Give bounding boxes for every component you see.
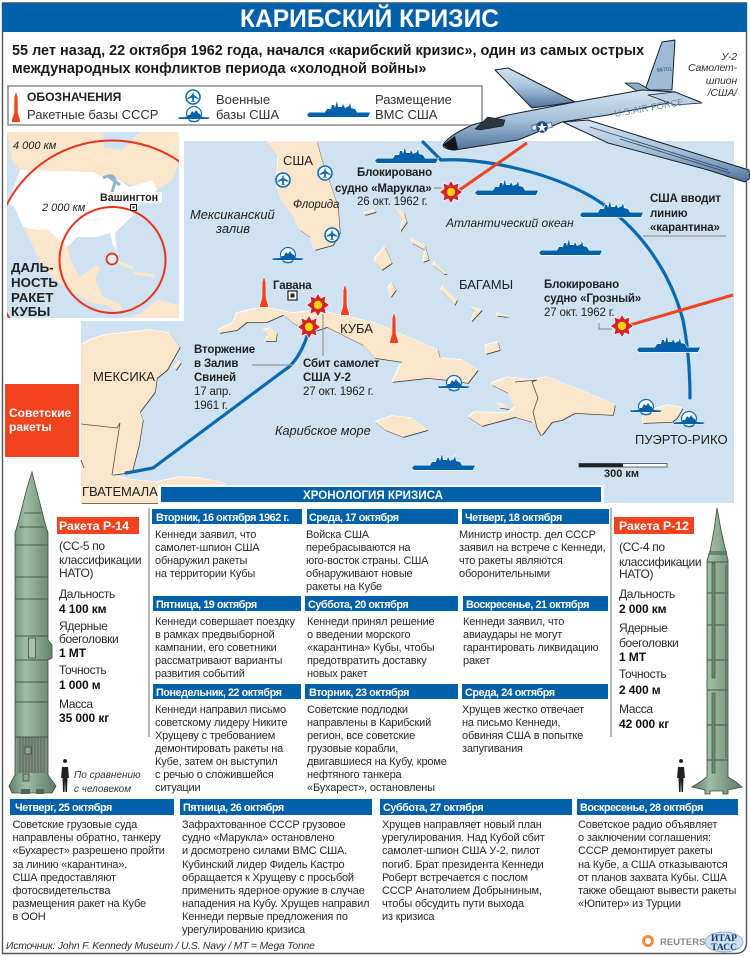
scale bar [579,464,667,480]
R-12 figures: 2 000 км [619,602,667,616]
timeline rules [149,508,611,737]
R-14 specs [57,517,141,725]
entry: 19 October [153,596,301,680]
entry: 17 October: перебрасываются на [306,542,411,554]
entry: 21 October: Кеннеди заявил, что [463,616,564,628]
legend label: US navy: Размещение [375,92,452,107]
entry: 21 October: ракет [463,655,490,667]
map labels: Карибское море [275,424,371,438]
4000 km range circle [0,140,230,378]
map labels: Свиней [194,372,236,384]
entry: 19 October: рассматривают варианты [155,655,282,667]
section tag: soviet missiles: ракеты [9,420,52,434]
title banner: КАРИБСКИЙ КРИЗИС [240,3,499,33]
entry: 27 October: Суббота, 27 октября [383,802,483,814]
plane fin number: 66701 [657,66,672,74]
entry: 26 October [180,799,372,936]
map labels [82,153,728,499]
inset title: НОСТЬ [11,275,58,290]
entry: 16 October: на территории Кубы [155,568,255,580]
inset sea [7,132,179,318]
R-14 figures: Масса [59,697,93,711]
plane nose [443,136,458,150]
entry: 17 October: Среда, 17 октября [309,512,399,524]
entry: 25 October: направлены обратно, танкеру [12,832,161,844]
R-14 figures: боеголовки [59,632,118,646]
map labels: Сбит самолет [303,358,380,370]
logo: ITAR-TASS [705,932,743,953]
Cuba marker [106,254,118,264]
entry: 21 October: авиаудары не могут [463,629,562,641]
plane near wing [563,120,750,182]
plane caption: У-2 [720,51,737,63]
map labels: Блокировано [357,167,432,179]
map labels: США [283,153,313,168]
inset Mexico and Central America [23,227,123,312]
entry: 19 October: кампании, его советники [155,642,277,654]
R-12 figures: 1 МТ [619,650,647,664]
timeline heading: ХРОНОЛОГИЯ КРИЗИСА [303,488,443,502]
icon: man for scale right [677,759,685,792]
plane fuselage lettering: U.S.AIR FORCE [614,97,685,120]
entry: 28 October: СССР демонтирует ракеты [578,845,713,857]
land masses [80,141,684,504]
icon: air base legend [186,90,200,104]
entry: 27 October [380,799,572,923]
entry: 20 October: о введении морского [307,629,410,641]
source line: Источник: John F. Kennedy Museum / U.S. Navy / MT = Mega Tonne [6,941,315,952]
main map [80,141,734,504]
navy ships [375,147,700,470]
entry: 22 October: советскому лидеру Никите [155,717,287,729]
R-14 figures: Дальность [59,587,115,601]
plane wing detail [590,127,730,173]
plane near stabilizer [648,92,702,105]
invasion route [126,336,307,473]
inset USA [8,170,157,255]
map labels: МЕКСИКА [93,369,155,384]
R-14 figures: 35 000 кг [59,711,109,725]
legend label: US bases: базы США [216,107,279,122]
map labels: «карантина» [650,222,720,234]
air bases [276,166,339,242]
Havana marker [288,291,297,300]
entry: 22 October [153,684,301,794]
map labels: 26 окт. 1962 г. [357,196,427,208]
R-14 figures: 1 МТ [59,646,87,660]
plane caption: /США/ [707,87,738,99]
plane caption: шпион [706,75,737,87]
map labels: линию [650,208,688,220]
entry: 22 October: Понедельник, 22 октября [156,687,282,699]
entry: 22 October: с речью о сложившейся [155,769,274,781]
entry: 27 October: чтобы обсудить пути выхода [382,898,525,910]
R-12 description: (СС-4 по [619,540,665,554]
comparison note: По сравнению [74,770,141,781]
entry: 16 October: Вторник, 16 октября 1962 г. [156,512,289,524]
2000 km range circle [60,207,166,313]
US quarantine line [423,142,690,398]
entry: 24 October: запугивания [462,743,523,755]
entry: 23 October: «Бухарест», остановлены [307,782,435,794]
entry: 25 October: «Бухарест» разрешено пройти [12,845,165,857]
plane far stabilizer [625,83,650,93]
entry: 16 October: обнаружил ракеты [155,555,247,567]
entry: 17 October: ракеты на Кубе [306,581,382,593]
entry: 22 October: демонтировать ракеты на [155,743,284,755]
entry: 23 October: Советские подлодки [307,704,408,716]
entry: 23 October: Вторник, 23 октября [309,687,409,699]
legend label: US navy: ВМС США [375,107,438,122]
logo: ITAR-TASS: ИТАР [711,934,737,944]
map labels: США вводит [650,193,721,205]
entry: 25 October [10,799,174,923]
entry: 25 October: в ООН [12,911,46,923]
entry: 18 October: Министр иностр. дел СССР [459,529,596,541]
entry: 23 October [305,684,458,794]
comparison note: с человеком [74,784,131,795]
sea [81,141,734,503]
icon: naval base legend [178,106,210,122]
red flight line to Grozny [630,295,733,325]
entry: 26 October: Кеннеди первые предложения по [182,911,348,923]
map labels: 1961 г. [194,400,228,412]
map labels: Вторжение [194,344,255,356]
entry: 20 October: Суббота, 20 октября [308,599,408,611]
entry: 25 October: США предоставляют [12,872,116,884]
entry: 26 October: Пятница, 26 октября [183,802,284,814]
R-12 description: классификации [619,555,701,569]
entry: 26 October: Кубинский лидер Фидель Кастро [182,859,345,871]
illustration: R-12 missile [692,508,742,794]
intro text: международных конфликтов периода «холодной войны» [12,61,426,77]
legend [8,86,482,125]
entry: 23 October: двигавшиеся на Кубу, кроме [307,756,447,768]
R-14 description: (СС-5 по [59,539,105,553]
entry: 23 October: нефтяного танкера [307,769,403,781]
R-14 figures: Ядерные [59,619,108,633]
map labels: судно «Грозный» [544,293,641,305]
timeline [10,509,738,936]
entry: 27 October: погиб. Брат президента Кеннеди [382,859,544,871]
map labels: 27 окт. 1962 г. [544,307,614,319]
entry: 28 October: «Юпитер» из Турции [578,898,681,910]
map labels: Гавана [273,280,312,292]
entry: 22 October: Кеннеди направил письмо [155,704,286,716]
plane far wing [495,68,575,108]
inset Great Lakes [103,176,120,192]
entry: 26 October: обращается к Хрущеву с просьбой [182,872,354,884]
map labels: Блокировано [544,279,619,291]
entry: 18 October: заявил на встрече с Кеннеди, [459,542,606,554]
entry: 24 October: на письмо Кеннеди, [462,717,560,729]
entry: 17 October: обнаруживают новые [306,568,413,580]
entry: 27 October: Хрущев направляет новый план [382,819,542,831]
entry: 22 October: ситуации [155,782,200,794]
legend label: US bases: Военные [216,92,270,107]
R-14 label: Ракета Р-14 [59,519,129,533]
entry: 28 October: также обещают вывести ракеты [578,885,736,897]
entry: 16 October: самолет-шпион США [155,542,260,554]
inset labels [13,140,162,214]
logo: ITAR-TASS: ТАСС [711,943,737,953]
R-12 label: Ракета Р-12 [619,519,689,533]
entry: 27 October: Роберт встречается с послом [382,872,528,884]
explosions [298,181,633,338]
map labels: Атлантический океан [445,216,574,230]
map labels: 17 апр. [194,386,231,398]
entry: 17 October [306,509,458,593]
R-14 description: НАТО) [59,566,93,580]
entry: 26 October: судно «Марукла» остановлено [182,832,334,844]
R-12 figures: Масса [619,702,653,716]
entry: 24 October: обвиняя США в попытке [462,730,583,742]
title banner [2,3,747,33]
entry: 19 October: развития событий [155,668,245,680]
plane roundel [532,121,552,133]
entry: 18 October: Четверг, 18 октября [465,512,562,524]
legend label: rocket bases: Ракетные базы СССР [27,107,158,122]
entry: 22 October: Кубе, затем он выступил [155,756,278,768]
scale bar: 300 км [604,468,639,480]
map labels: Мексиканский [190,207,275,222]
map labels: БАГАМЫ [459,277,513,292]
entry: 21 October [463,596,608,667]
legend title: ОБОЗНАЧЕНИЯ [27,90,121,104]
plane fuselage [443,90,700,150]
map labels: судно «Марукла» [335,183,432,195]
plane caption: Самолет- [688,62,738,74]
entry: 26 October: применить ядерное оружие в случае [182,885,365,897]
entry: 20 October: новых ракет [307,668,368,680]
map labels: КУБА [340,321,373,336]
inset title: ДАЛЬ- [11,260,54,275]
leader lines [252,188,726,365]
entry: 24 October: Среда, 24 октября [465,687,555,699]
entry: 27 October: самолет-шпион США У-2, пилот [382,845,540,857]
entry: 23 October: грузовые корабли, [307,743,398,755]
map labels: 27 окт. 1962 г. [303,386,373,398]
entry: 26 October: Зафрахтованное СССР грузовое [182,819,345,831]
timeline heading [158,485,604,504]
illustration: U-2 spy plane [443,40,750,182]
R-12 figures: Ядерные [619,621,668,635]
inset map: missile range [0,129,230,378]
R-14 figures: 1 000 м [59,678,101,692]
R-12 figures: Дальность [619,587,675,601]
entry: 20 October [305,596,458,680]
entry: 28 October: на Кубе, а США отказываются [578,859,728,871]
R-14 figures: 4 100 км [59,602,107,616]
inset South America [125,300,179,318]
entry: 26 October: нападения на Кубу. Хрущев направил [182,898,369,910]
entry: 18 October [459,509,609,580]
plane tail fin [645,40,675,90]
R-12 description: НАТО) [619,567,653,581]
entry: 21 October: Воскресенье, 21 октября [466,599,589,611]
entry: 25 October: за линию «карантина». [12,859,127,871]
entry: 26 October: урегулированию кризиса [182,924,306,936]
map labels: Флорида [293,199,339,211]
intro text: 55 лет назад, 22 октября 1962 года, начался «карибский кризис», один из самых острых [12,43,644,59]
entry: 21 October: гарантировать ликвидацию [463,642,598,654]
entry: 23 October: регион, все советские [307,730,415,742]
entry: 22 October: Хрущеву с требованием [155,730,275,742]
entry: 18 October: что ракеты являются [459,555,563,567]
Washington marker [130,204,136,210]
entry: 25 October: размещения ракет на Кубе [12,898,146,910]
entry: 17 October: Войска США [306,529,370,541]
section tag: soviet missiles: Советские [9,406,72,420]
entry: 28 October: о заключении соглашения: [578,832,711,844]
entry: 28 October [577,799,738,910]
entry: 25 October: Четверг, 25 октября [15,802,112,814]
icon: soviet rocket legend [12,92,20,122]
map labels: ПУЭРТО-РИКО [635,432,728,447]
entry: 20 October: «карантина» Кубы, чтобы [307,642,435,654]
R-12 figures: боеголовки [619,636,678,650]
inset labels: 2 000 км [41,202,86,214]
map labels: США У-2 [303,372,351,384]
map labels: ГВАТЕМАЛА [82,484,158,499]
inset title: КУБЫ [11,304,50,319]
entry: 24 October [462,684,608,755]
entry: 16 October: Кеннеди заявил, что [155,529,256,541]
entry: 28 October: Советское радио объявляет [578,819,717,831]
entry: 25 October: Советские грузовые суда [12,819,138,831]
entry: 17 October: юго-восток страны. США [306,555,429,567]
R-12 figures: Точность [619,667,666,681]
map labels: залив [215,221,250,236]
inset title: РАКЕТ [11,290,53,305]
icon: man for scale left [61,759,69,792]
entry: 18 October: оборонительными [459,568,550,580]
red flight line to Marucla [458,143,527,191]
entry: 19 October: Кеннеди совершает поездку [155,616,295,628]
map labels: в Залив [194,358,238,370]
naval bases [272,248,705,427]
entry: 16 October [152,509,302,580]
entry: 19 October: в рамках предвыборной [155,629,275,641]
entry: 23 October: направлены в Карибский [307,717,431,729]
inset Canada [7,132,179,190]
section tag: soviet missiles [5,384,79,457]
plane canopy [475,117,505,130]
illustration: R-14 missile [9,472,56,794]
soviet rocket bases [260,277,398,343]
borders [81,380,541,475]
inset Caribbean islands [118,262,155,276]
inset labels: 4 000 км [13,140,57,152]
logo: Reuters: REUTERS [660,936,706,947]
entry: 28 October: Воскресенье, 28 октября [580,802,703,814]
entry: 20 October: предотвратить доставку [307,655,427,667]
entry: 28 October: от планов захвата Кубы. США [578,872,728,884]
entry: 24 October: Хрущев жестко отвечает [462,704,584,716]
inset labels: Вашингтон [100,192,158,204]
icon: navy ship legend [307,101,370,117]
R-14 figures: Точность [59,663,106,677]
entry: 20 October: Кеннеди принял решение [307,616,435,628]
entry: 26 October: и досмотрено силами ВМС США. [182,845,347,857]
entry: 27 October: урегулирования. Над Кубой сбит [382,832,545,844]
entry: 27 October: из кризиса [382,911,435,923]
R-12 specs [614,517,701,731]
R-12 figures: 2 400 м [619,683,661,697]
entry: 25 October: фотосвидетельства [12,885,111,897]
entry: 27 October: СССР Анатолием Добрыниным, [382,885,542,897]
entry: 19 October: Пятница, 19 октября [156,599,257,611]
R-14 description: классификации [59,553,141,567]
R-12 figures: 42 000 кг [619,717,669,731]
